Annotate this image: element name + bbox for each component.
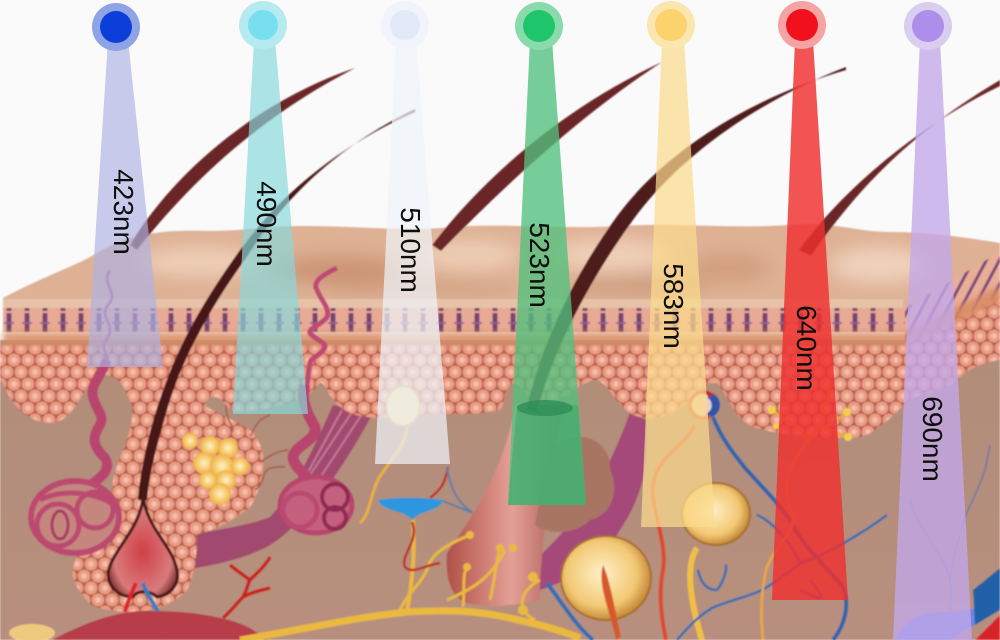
label 490nm: 490nm [251, 181, 282, 267]
light source 423nm [92, 3, 140, 51]
hair bulb [108, 497, 178, 597]
orange pigment layer [3, 285, 1000, 346]
central follicle root [447, 405, 565, 606]
label 510nm: 510nm [395, 207, 426, 293]
red vessel [223, 557, 270, 618]
band with ticks, right rising side [905, 252, 1000, 345]
hair 4 [526, 67, 846, 412]
beam 640nm [772, 40, 848, 600]
band with ticks [3, 308, 908, 332]
beam 583nm [641, 40, 715, 527]
round gland [561, 536, 651, 640]
label 640nm: 640nm [791, 305, 822, 391]
right sweat gland [280, 268, 352, 533]
left sweat gland [31, 270, 119, 553]
hair 3 [432, 62, 662, 251]
vessel ring [690, 392, 720, 418]
beam 490nm [233, 40, 308, 414]
muscle left [190, 405, 372, 569]
small gland with stalk [682, 483, 750, 640]
small veins around fat [226, 405, 288, 490]
label 690nm: 690nm [917, 396, 948, 482]
hair bulb vessels [125, 583, 167, 640]
beam 510nm [375, 40, 450, 464]
vessels [547, 380, 990, 640]
beam 690nm [893, 40, 972, 640]
hair 5 [799, 80, 1000, 256]
right vessels [895, 568, 1000, 640]
dermis [0, 340, 1000, 640]
label 423nm: 423nm [108, 169, 139, 255]
sebaceous gland [535, 437, 614, 532]
bottom nerve with branches [240, 520, 580, 640]
fat blob bottom left [9, 624, 55, 640]
muscle right [535, 412, 647, 590]
nerve ending left [360, 386, 420, 523]
beam 423nm [87, 40, 163, 367]
light source 490nm [239, 1, 287, 49]
hair 1 [130, 68, 355, 250]
yellow nerve knobs [768, 406, 852, 441]
label 523nm: 523nm [524, 222, 555, 308]
fat cluster [182, 433, 249, 505]
light source 523nm [515, 2, 563, 50]
label 583nm: 583nm [658, 263, 689, 349]
light source 510nm [381, 1, 429, 49]
bottom artery [52, 611, 268, 640]
beam 523nm [508, 40, 586, 505]
nerve knobs [463, 531, 538, 615]
blue receptor [378, 467, 473, 570]
light source 690nm [904, 2, 952, 50]
light source 583nm [647, 1, 695, 49]
hair 2 [138, 109, 415, 500]
skin surface [3, 224, 1000, 320]
light source 640nm [778, 1, 826, 49]
epidermis cell layer and follicle sheath [0, 295, 1000, 612]
